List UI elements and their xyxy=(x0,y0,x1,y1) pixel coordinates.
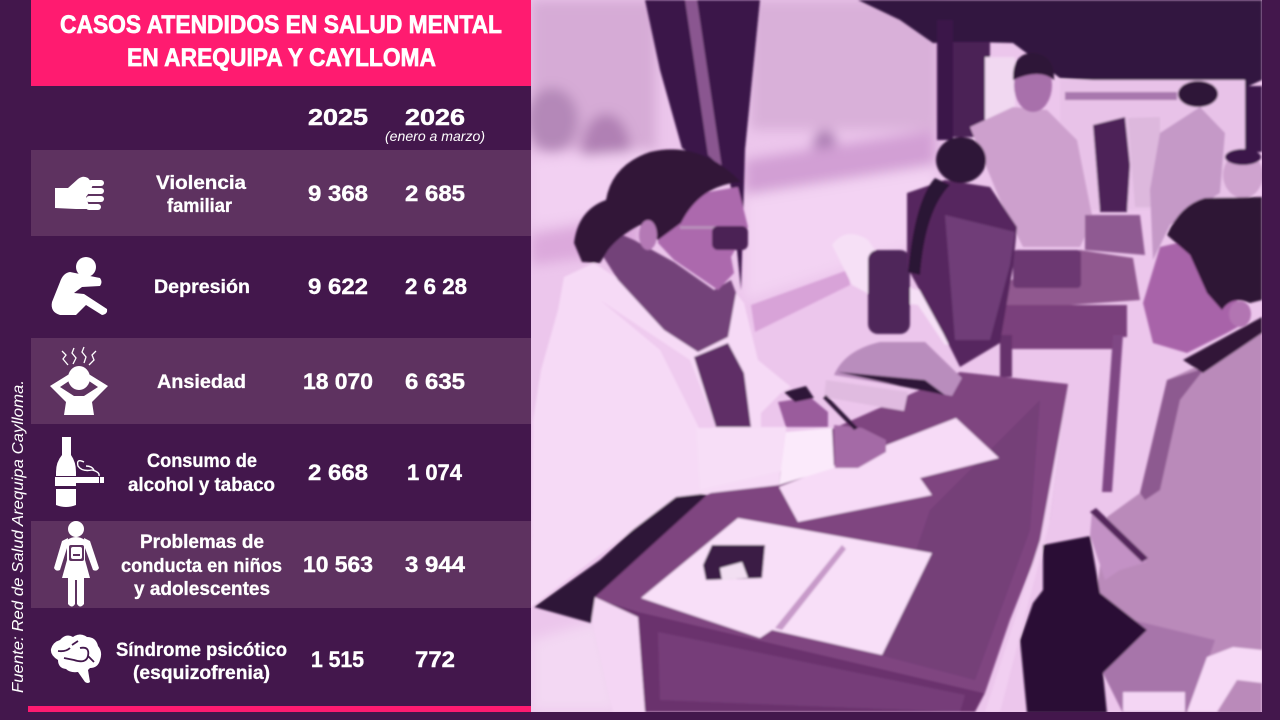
main table top xyxy=(591,372,1068,693)
tent left curtain xyxy=(645,0,760,290)
right woman collar xyxy=(1183,317,1262,373)
title banner xyxy=(31,0,531,86)
icon: fist xyxy=(55,177,104,210)
row: Ansiedad: 6 635 xyxy=(405,369,465,394)
forms on table xyxy=(779,418,999,522)
values: 10 563 xyxy=(303,552,373,577)
label: Violencia xyxy=(156,173,246,194)
row: Depresión xyxy=(52,257,467,315)
icon: brain xyxy=(51,634,101,683)
left woman pants xyxy=(534,490,707,623)
icon: sitting person xyxy=(52,257,107,315)
values: 1 515 xyxy=(311,647,364,672)
label: Síndrome psicótico xyxy=(116,640,287,661)
label: Ansiedad xyxy=(157,372,246,393)
right edge strip xyxy=(1262,0,1280,720)
cuff and hand with pen xyxy=(779,428,834,485)
row: Consumo de alcohol y tabaco: 1 074 xyxy=(407,460,463,485)
year headers xyxy=(308,104,485,144)
row: Depresión: 2 6 28 xyxy=(405,274,467,299)
right woman xyxy=(1097,330,1262,713)
row: Violencia familiar: familiar xyxy=(167,196,233,217)
values: 9 368 xyxy=(308,181,368,206)
right woman hair xyxy=(1167,197,1262,310)
seated woman xyxy=(907,180,1017,367)
row: Problemas de conducta xyxy=(31,521,531,608)
row: Consumo de alcohol y tabaco: alcohol y tabaco xyxy=(128,475,275,496)
photo: two women at a mental-health attention table xyxy=(526,0,1263,713)
pencil bag and phone xyxy=(834,342,962,396)
values: 2 668 xyxy=(308,460,368,485)
source credit: Fuente: Red de Salud Arequipa Caylloma. xyxy=(10,380,27,693)
row: Síndrome psicótico xyxy=(51,634,455,684)
row: Problemas de conducta: y adolescentes xyxy=(134,579,270,600)
scarf xyxy=(601,230,736,352)
canopy xyxy=(858,0,1262,90)
standing man xyxy=(970,107,1093,247)
year headers: (enero a marzo) xyxy=(385,128,485,144)
label: Consumo de xyxy=(147,451,257,472)
row: Síndrome psicótico: 772 xyxy=(415,647,455,672)
left woman body xyxy=(531,263,791,607)
right woman hand and phone xyxy=(1088,514,1142,578)
main table front xyxy=(591,597,985,712)
right woman face xyxy=(1142,242,1238,354)
year headers: 2026 xyxy=(405,104,465,130)
title banner: EN AREQUIPA Y CAYLLOMA xyxy=(127,44,436,72)
row: Problemas de conducta: 3 944 xyxy=(405,552,466,577)
ground strip xyxy=(751,270,850,332)
row: Violencia familiar: 2 685 xyxy=(405,181,465,206)
stamp xyxy=(703,545,765,580)
row: Síndrome psicótico: (esquizofrenia) xyxy=(133,663,270,684)
background people xyxy=(1093,117,1130,212)
face and hair xyxy=(658,187,748,290)
values: 18 070 xyxy=(303,369,373,394)
label: Depresión xyxy=(154,277,250,298)
label: Problemas de xyxy=(140,532,264,553)
values: 9 622 xyxy=(308,274,368,299)
row: Violencia familiar xyxy=(31,150,531,236)
row: Problemas de conducta: conducta en niños xyxy=(121,556,282,577)
icon: bottle and cigarette xyxy=(55,437,104,507)
row: Ansiedad xyxy=(31,338,531,424)
icon: child with backpack xyxy=(54,521,99,606)
year headers: 2025 xyxy=(308,104,368,130)
icon: person holding head xyxy=(50,347,108,415)
white chair xyxy=(832,234,960,345)
title banner: CASOS ATENDIDOS EN SALUD MENTAL xyxy=(60,11,502,39)
back room xyxy=(1060,80,1245,210)
back table xyxy=(1000,250,1140,310)
right woman trousers xyxy=(1020,536,1147,713)
right woman chair xyxy=(1187,647,1262,712)
bottom accent bar xyxy=(28,706,531,712)
row: Consumo de alcohol y tabaco xyxy=(55,437,463,507)
